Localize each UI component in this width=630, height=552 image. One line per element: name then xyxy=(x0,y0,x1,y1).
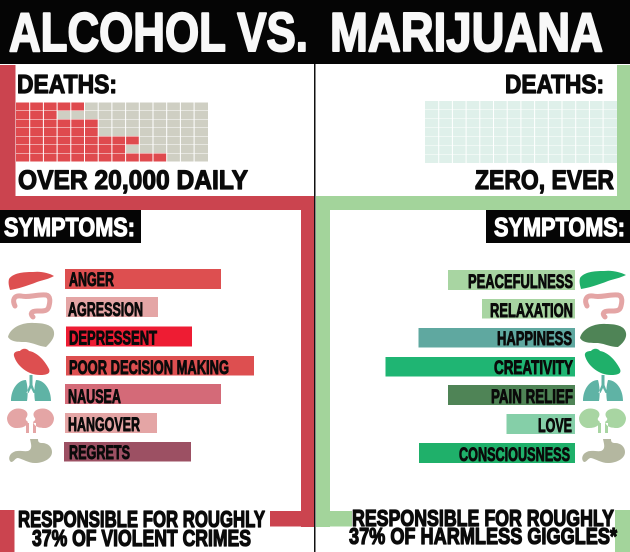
heading: alcohol symptoms: SYMPTOMS: xyxy=(4,212,135,242)
bar: happiness xyxy=(418,328,575,350)
bar: happiness: HAPPINESS xyxy=(497,329,572,350)
icon: lungs xyxy=(11,375,51,401)
bar: agression: AGRESSION xyxy=(68,300,143,321)
title banner: ALCOHOL VS. xyxy=(9,1,308,63)
icon: kidneys xyxy=(579,408,626,433)
title banner xyxy=(0,0,630,64)
icon: brain xyxy=(580,324,626,347)
bar: anger: ANGER xyxy=(69,270,114,291)
heading: alcohol deaths: DEATHS: xyxy=(17,69,117,99)
icon: liver xyxy=(9,272,54,290)
bar: consciousness: CONSCIOUSNESS xyxy=(459,445,570,466)
bar: regrets xyxy=(64,442,191,464)
bar: peacefulness: PEACEFULNESS xyxy=(468,272,573,293)
bar: anger xyxy=(65,269,221,291)
icon: lungs xyxy=(583,375,623,401)
bar: depressent: DEPRESSENT xyxy=(69,328,157,350)
bar: creativity xyxy=(386,357,575,379)
icon: kidneys xyxy=(7,408,54,433)
icon: intestine xyxy=(586,295,622,317)
callout: violent crimes xyxy=(18,506,265,551)
waffle chart: alcohol deaths xyxy=(16,102,208,162)
waffle chart: marijuana deaths xyxy=(425,100,617,164)
bar: nausea xyxy=(65,384,221,408)
icon: stomach xyxy=(9,439,52,463)
panel: alcohol symptoms xyxy=(0,209,314,552)
bar: relaxation xyxy=(482,299,575,322)
bar: poor decision making: POOR DECISION MAKING xyxy=(69,358,229,379)
icon: heart xyxy=(585,349,620,375)
bar: agression xyxy=(66,297,158,321)
heading: marijuana deaths: DEATHS: xyxy=(505,69,604,99)
bar: peacefulness xyxy=(448,270,575,293)
bar: relaxation: RELAXATION xyxy=(490,301,573,322)
icon: liver xyxy=(580,271,626,289)
stat: over 20,000 daily: OVER 20,000 DAILY xyxy=(18,165,248,195)
panel: alcohol deaths xyxy=(0,65,314,210)
icon: heart xyxy=(14,349,49,375)
bar: pain relief xyxy=(448,385,575,408)
panel: marijuana deaths xyxy=(316,65,630,210)
bar: nausea: NAUSEA xyxy=(68,387,121,408)
bar: hangover: HANGOVER xyxy=(68,415,140,436)
bar: creativity: CREATIVITY xyxy=(494,358,573,379)
panel: marijuana symptoms xyxy=(316,209,630,552)
callout: violent crimes: 37% OF VIOLENT CRIMES xyxy=(32,525,251,551)
bar: regrets: REGRETS xyxy=(69,443,130,464)
icon: intestine xyxy=(14,295,50,317)
icon: brain xyxy=(8,323,54,347)
bar: pain relief: PAIN RELIEF xyxy=(491,387,573,408)
callout: harmless giggles xyxy=(349,505,617,549)
callout: violent crimes: RESPONSIBLE FOR ROUGHLY xyxy=(18,506,265,532)
bar: consciousness xyxy=(419,443,575,466)
bar: love xyxy=(506,414,575,437)
bar: love: LOVE xyxy=(538,416,572,437)
icon: stomach xyxy=(582,439,625,463)
